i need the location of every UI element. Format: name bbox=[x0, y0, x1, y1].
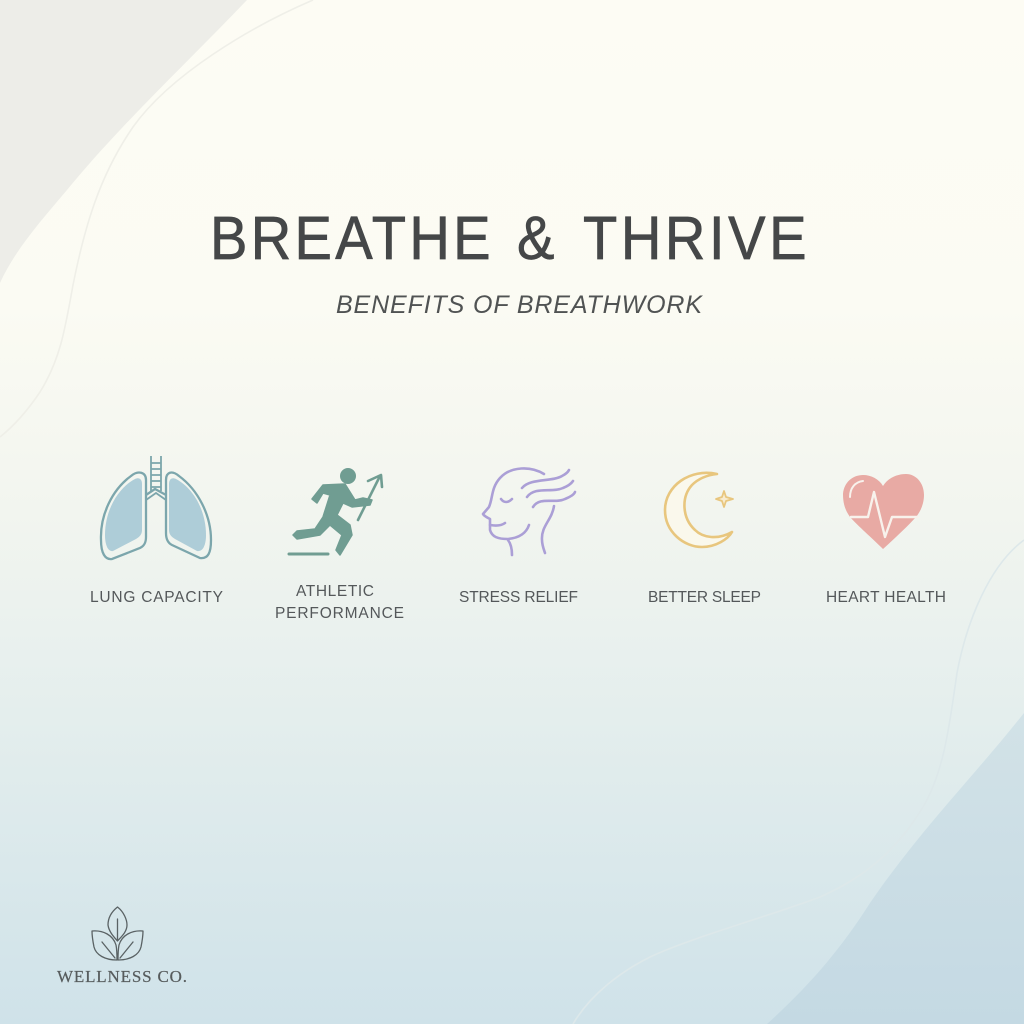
benefit: lung capacity bbox=[90, 456, 223, 606]
title: BREATHE bbox=[210, 205, 491, 273]
icon: runner with arrow bbox=[289, 468, 382, 555]
label: lung capacity: LUNG CAPACITY bbox=[90, 589, 223, 606]
title: THRIVE bbox=[583, 205, 807, 273]
label: better sleep: BETTER SLEEP bbox=[648, 589, 761, 606]
logo: wellness co. bbox=[57, 907, 187, 986]
benefit: athletic performance bbox=[275, 468, 404, 622]
benefit: heart health bbox=[826, 474, 946, 606]
icon: heart with pulse bbox=[843, 474, 924, 549]
top-left corner shape bbox=[0, 0, 247, 283]
icon: head with flowing air bbox=[483, 468, 575, 555]
benefit: stress relief bbox=[459, 468, 578, 606]
title bbox=[210, 205, 807, 273]
wordmark: WELLNESS CO. bbox=[57, 967, 187, 986]
title: & bbox=[517, 205, 554, 273]
icon: three leaves bbox=[92, 907, 143, 960]
subtitle: BENEFITS OF BREATHWORK bbox=[336, 291, 703, 319]
label: athletic performance: PERFORMANCE bbox=[275, 605, 404, 622]
label: stress relief: STRESS RELIEF bbox=[459, 589, 578, 606]
label: athletic performance: ATHLETIC bbox=[296, 583, 374, 600]
benefit: better sleep bbox=[648, 473, 761, 606]
icon: crescent moon and star bbox=[665, 473, 733, 547]
label: heart health: HEART HEALTH bbox=[826, 589, 946, 606]
bottom-right corner shape bbox=[767, 713, 1024, 1024]
icon: lungs bbox=[101, 456, 211, 559]
